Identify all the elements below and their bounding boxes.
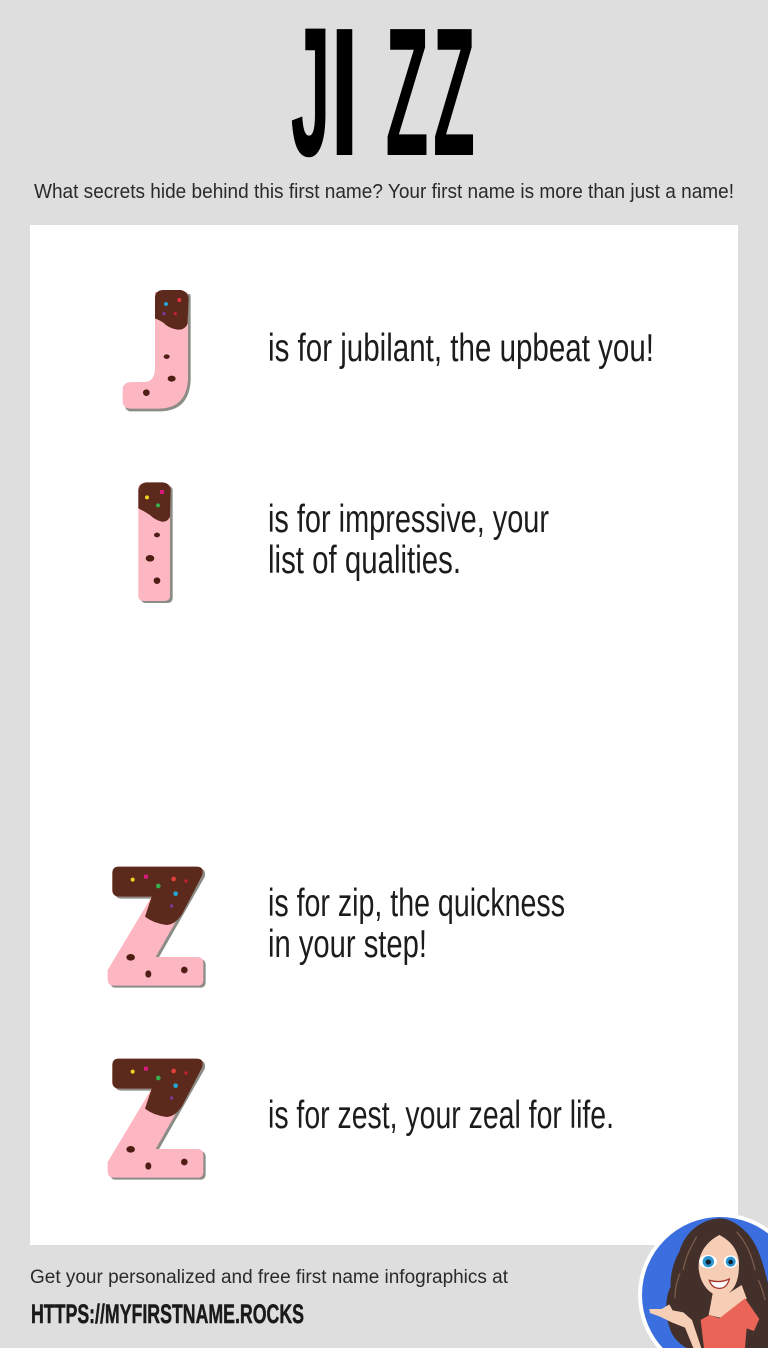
text: I meaning: list of qualities. bbox=[268, 539, 461, 582]
text: I meaning: is for impressive, your bbox=[268, 498, 549, 541]
arm and hand bbox=[649, 1304, 701, 1348]
smile bbox=[709, 1279, 729, 1288]
icon: letter J bbox=[123, 290, 191, 411]
icon: second letter Z bbox=[108, 1059, 206, 1180]
eyes bbox=[699, 1255, 717, 1268]
title bbox=[291, 0, 475, 194]
text: first Z meaning bbox=[268, 882, 565, 966]
text: first Z meaning: is for zip, the quickness bbox=[268, 882, 565, 925]
footer call to action: Get your personalized and free first name infographics at bbox=[30, 1267, 509, 1288]
hair bbox=[666, 1218, 768, 1348]
neck and chest bbox=[709, 1285, 747, 1320]
icon: letter I bbox=[138, 482, 173, 603]
icon: avatar bbox=[638, 1213, 768, 1348]
text: second Z meaning: is for zest, your zeal for life. bbox=[268, 1094, 614, 1137]
text: J meaning: is for jubilant, the upbeat you! bbox=[268, 327, 654, 370]
icon: letter Z bbox=[108, 867, 206, 988]
face bbox=[699, 1235, 739, 1296]
text: I meaning bbox=[268, 498, 549, 582]
coral top bbox=[701, 1298, 759, 1348]
subtitle: What secrets hide behind this first name? Your first name is more than just a name! bbox=[34, 181, 734, 203]
footer url: HTTPS://MYFIRSTNAME.ROCKS bbox=[31, 1299, 304, 1329]
text: first Z meaning: in your step! bbox=[268, 923, 427, 966]
panel: letter meanings bbox=[30, 225, 738, 1245]
